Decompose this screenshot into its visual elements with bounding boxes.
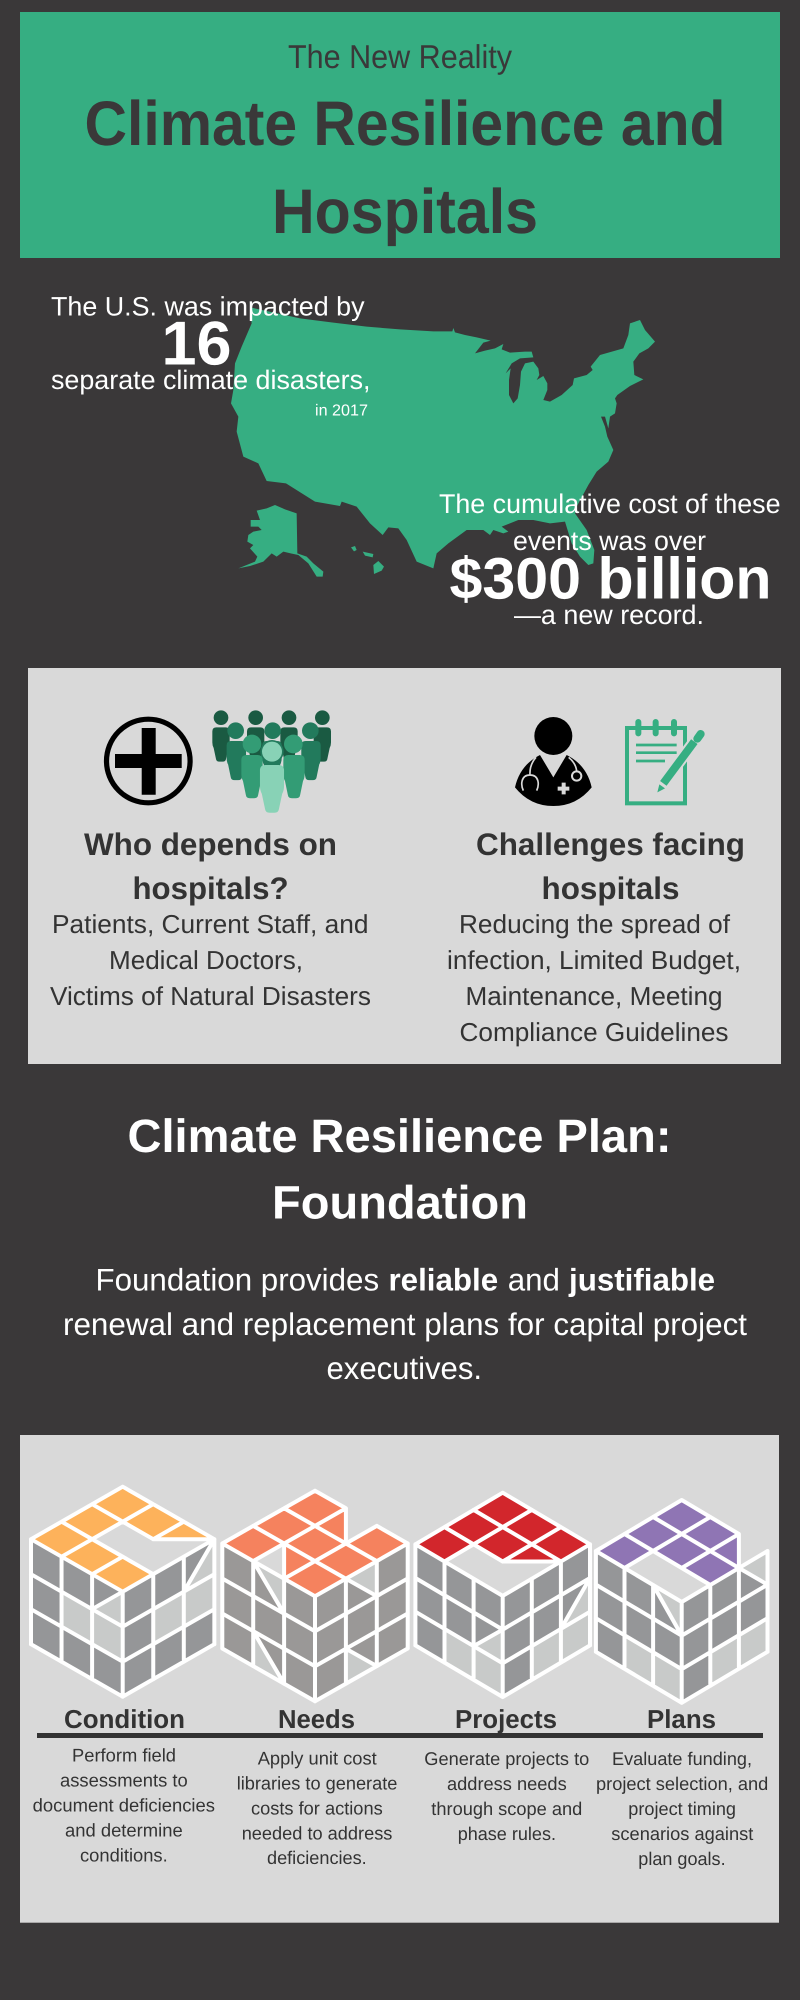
text block: cumulative cost: $300 billion xyxy=(450,546,772,612)
text block: 16 climate disasters xyxy=(51,292,370,420)
text block: plans: plan goals. xyxy=(638,1848,726,1869)
text block: who depends: Victims of Natural Disasters xyxy=(50,981,371,1011)
heading: climate resilience plan: Foundation xyxy=(272,1177,528,1229)
text block: condition xyxy=(33,1744,215,1865)
text block: condition: conditions. xyxy=(80,1844,168,1865)
text block: condition: and determine xyxy=(65,1819,183,1840)
text block: projects: Generate projects to xyxy=(424,1748,589,1769)
title: Hospitals xyxy=(272,177,538,247)
text block: needs xyxy=(237,1747,397,1868)
text block: needs: costs for actions xyxy=(251,1797,383,1818)
heading: who depends on hospitals: Who depends on xyxy=(84,827,337,862)
heading: who depends on hospitals xyxy=(84,827,337,906)
icon: notepad and pencil xyxy=(627,722,701,803)
text block: projects xyxy=(424,1748,589,1844)
text block: cumulative cost: events was over xyxy=(513,526,706,556)
text block: 16 climate disasters: in 2017 xyxy=(315,402,368,420)
panel: foundation modules xyxy=(20,1435,779,1923)
text block: challenges xyxy=(447,909,741,1047)
text block: challenges: infection, Limited Budget, xyxy=(447,945,741,975)
text block: plans xyxy=(596,1748,768,1869)
icon: needs cube xyxy=(222,1491,408,1701)
module labels: Plans xyxy=(647,1704,716,1734)
icon: doctor xyxy=(515,717,592,806)
text block: cumulative cost xyxy=(439,489,780,630)
heading: challenges facing hospitals: hospitals xyxy=(542,871,680,906)
text block: projects: through scope and xyxy=(431,1798,582,1819)
text block: cumulative cost: The cumulative cost of these xyxy=(439,489,780,519)
text block: foundation description: justifiable xyxy=(568,1263,715,1298)
heading: climate resilience plan: Climate Resilience Plan: xyxy=(128,1110,672,1162)
text block: cumulative cost: —a new record. xyxy=(514,600,704,630)
text block: projects: address needs xyxy=(447,1773,567,1794)
text block: foundation description: renewal and replacement plans for capital project xyxy=(63,1307,747,1342)
text block: plans: project timing xyxy=(628,1798,736,1819)
text block: 16 climate disasters: The U.S. was impacted by xyxy=(51,292,365,322)
panel: title banner xyxy=(20,12,780,258)
text block: needs: deficiencies. xyxy=(267,1847,367,1868)
panel: who depends and challenges xyxy=(28,668,781,1064)
heading: challenges facing hospitals: Challenges facing xyxy=(476,827,745,862)
text block: plans: project selection, and xyxy=(596,1773,768,1794)
text block: challenges: Reducing the spread of xyxy=(459,909,731,939)
text block: condition: document deficiencies xyxy=(33,1794,215,1815)
module labels: Projects xyxy=(455,1704,557,1734)
heading: climate resilience plan xyxy=(128,1110,672,1229)
heading: who depends on hospitals: hospitals? xyxy=(132,871,288,906)
text block: foundation description xyxy=(63,1263,747,1386)
text block: who depends xyxy=(50,909,371,1011)
module labels: Condition xyxy=(64,1704,185,1734)
text block: projects: phase rules. xyxy=(458,1823,556,1844)
module labels: Needs xyxy=(278,1704,355,1734)
text block: needs: needed to address xyxy=(242,1822,392,1843)
module labels xyxy=(64,1704,716,1734)
text block: foundation description: Foundation provides xyxy=(96,1263,379,1298)
text block: foundation description: executives. xyxy=(326,1351,482,1386)
map: United States xyxy=(231,307,655,577)
icon: condition cube xyxy=(31,1487,214,1697)
text block: challenges: Maintenance, Meeting xyxy=(466,981,722,1011)
text block: foundation description: reliable xyxy=(388,1263,498,1298)
heading: challenges facing hospitals xyxy=(476,827,745,906)
text block: foundation description: and xyxy=(508,1263,560,1298)
text block: challenges: Compliance Guidelines xyxy=(460,1017,728,1047)
text block: 16 climate disasters: separate climate disasters, xyxy=(51,365,370,395)
icon: medical cross xyxy=(106,719,190,803)
text block: 16 climate disasters: 16 xyxy=(162,310,232,378)
text block: plans: Evaluate funding, xyxy=(612,1748,752,1769)
subtitle: The New Reality xyxy=(288,38,512,75)
text block: needs: Apply unit cost xyxy=(258,1747,377,1768)
title xyxy=(84,89,726,247)
text block: plans: scenarios against xyxy=(611,1823,753,1844)
icon: projects cube xyxy=(415,1493,590,1697)
text block: condition: assessments to xyxy=(60,1770,188,1791)
text block: who depends: Patients, Current Staff, and xyxy=(52,909,368,939)
title: Climate Resilience and xyxy=(84,89,726,159)
text block: who depends: Medical Doctors, xyxy=(109,945,303,975)
text block: needs: libraries to generate xyxy=(237,1772,397,1793)
text block: condition: Perform field xyxy=(72,1744,176,1765)
icon: group of people xyxy=(212,710,331,813)
icon: plans cube xyxy=(596,1500,768,1703)
